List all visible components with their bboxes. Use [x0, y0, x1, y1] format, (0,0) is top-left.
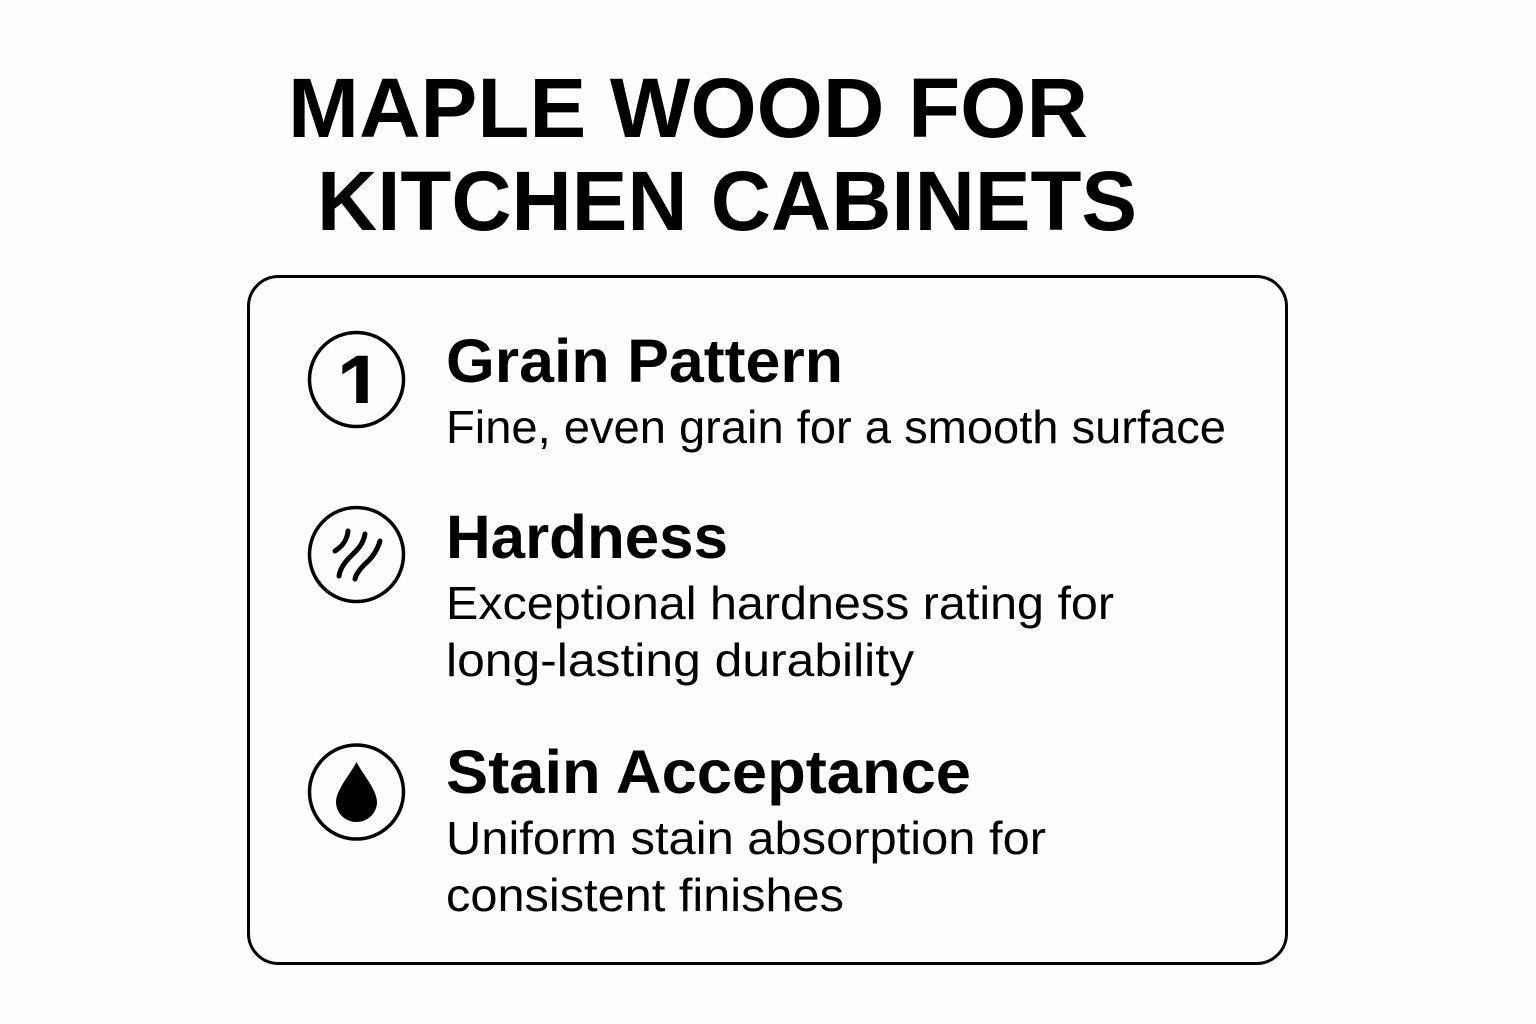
section: hardness: Exceptional hardness rating for — [446, 577, 1114, 629]
section: stain acceptance: Uniform stain absorption for — [446, 812, 1046, 864]
section: stain acceptance — [446, 738, 1046, 921]
title — [288, 61, 1137, 248]
section: stain acceptance: Stain Acceptance — [446, 738, 971, 806]
section: stain acceptance: consistent finishes — [446, 869, 844, 921]
icon: number one in circle — [310, 332, 404, 432]
section: grain pattern: Grain Pattern — [446, 327, 843, 395]
panel: maple wood properties — [248, 276, 1286, 964]
section: hardness: Hardness — [446, 503, 728, 571]
icon: number one in circle: 1 — [337, 338, 383, 432]
icon: stain drop in circle — [310, 745, 404, 839]
title: MAPLE WOOD FOR — [288, 61, 1088, 155]
section: hardness — [446, 503, 1114, 686]
title: KITCHEN CABINETS — [317, 154, 1137, 248]
section: grain pattern: Fine, even grain for a smooth surface — [446, 401, 1226, 453]
section: grain pattern — [446, 327, 1226, 453]
section: hardness: long-lasting durability — [446, 634, 914, 686]
icon: wavy grain lines in circle — [310, 508, 404, 602]
